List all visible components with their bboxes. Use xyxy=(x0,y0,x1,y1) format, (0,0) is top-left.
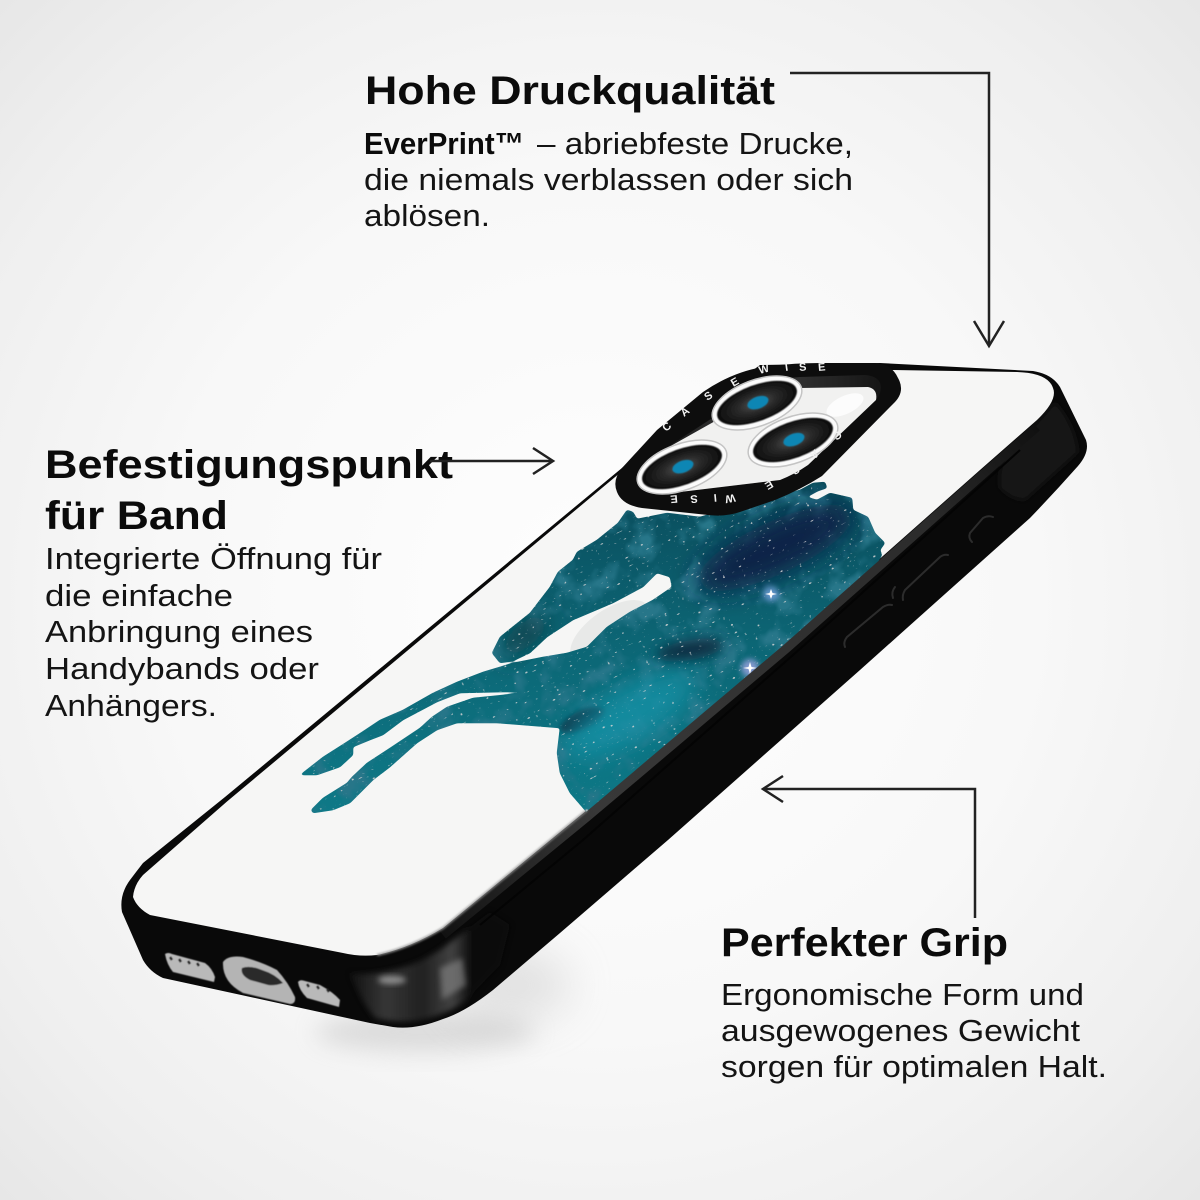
heading: Befestigungspunkt für Band: Befestigungspunkt xyxy=(45,443,453,487)
side buttons xyxy=(844,516,993,647)
text block: strap description: Handybands oder xyxy=(45,652,319,686)
case body xyxy=(121,363,1087,1028)
bright stars xyxy=(741,586,779,677)
magnet ring xyxy=(560,588,660,676)
heading: Hohe Druckqualität: Hohe Druckqualität xyxy=(365,69,775,113)
text block: grip description: Ergonomische Form und xyxy=(721,978,1084,1012)
callout: print quality xyxy=(364,69,1004,346)
star speckles xyxy=(310,484,882,812)
horse artwork xyxy=(302,482,884,813)
ring lettering: CASEWISE xyxy=(660,361,826,434)
callout: grip xyxy=(721,776,1107,1084)
text block: strap description xyxy=(45,542,382,723)
lens left xyxy=(630,429,734,505)
phone with case xyxy=(121,363,1087,1058)
lens top xyxy=(705,365,809,441)
ring lettering xyxy=(660,361,844,505)
text block: grip description: sorgen für optimalen Halt. xyxy=(721,1050,1107,1084)
text block: EverPrint description: ablösen. xyxy=(364,199,490,233)
text block: EverPrint description: die niemals verblassen oder sich xyxy=(364,163,853,197)
camera ring with lenses xyxy=(615,361,901,516)
callout: strap attachment xyxy=(45,443,553,723)
text block: strap description: Integrierte Öffnung für xyxy=(45,542,382,576)
arrow: to strap opening xyxy=(430,448,553,474)
text block: strap description: die einfache xyxy=(45,579,233,613)
white back panel xyxy=(133,370,1054,956)
heading: Befestigungspunkt für Band xyxy=(45,443,453,538)
text block: EverPrint description xyxy=(364,127,853,233)
arrow: to top of case xyxy=(790,73,1004,346)
lens right xyxy=(741,402,845,478)
bottom speakers and port xyxy=(165,953,340,1007)
arrow: to case side xyxy=(763,776,975,918)
text block: grip description: ausgewogenes Gewicht xyxy=(721,1014,1081,1048)
heading: Befestigungspunkt für Band: für Band xyxy=(45,494,228,538)
heading: Perfekter Grip: Perfekter Grip xyxy=(721,921,1008,965)
ring lettering: CASEWISE xyxy=(670,428,844,505)
text block: grip description xyxy=(721,978,1107,1084)
nebula shadows xyxy=(310,485,883,812)
bottom corner gloss xyxy=(350,912,510,1022)
side bumper bands xyxy=(377,427,1037,955)
drop shadow xyxy=(315,949,570,1052)
text block: strap description: Anbringung eines xyxy=(45,615,313,649)
mute switch area xyxy=(999,402,1078,500)
text block: EverPrint description: – abriebfeste Drucke, xyxy=(537,127,853,161)
text block: EverPrint description: EverPrint™ xyxy=(364,127,524,161)
text block: strap description: Anhängers. xyxy=(45,689,217,723)
